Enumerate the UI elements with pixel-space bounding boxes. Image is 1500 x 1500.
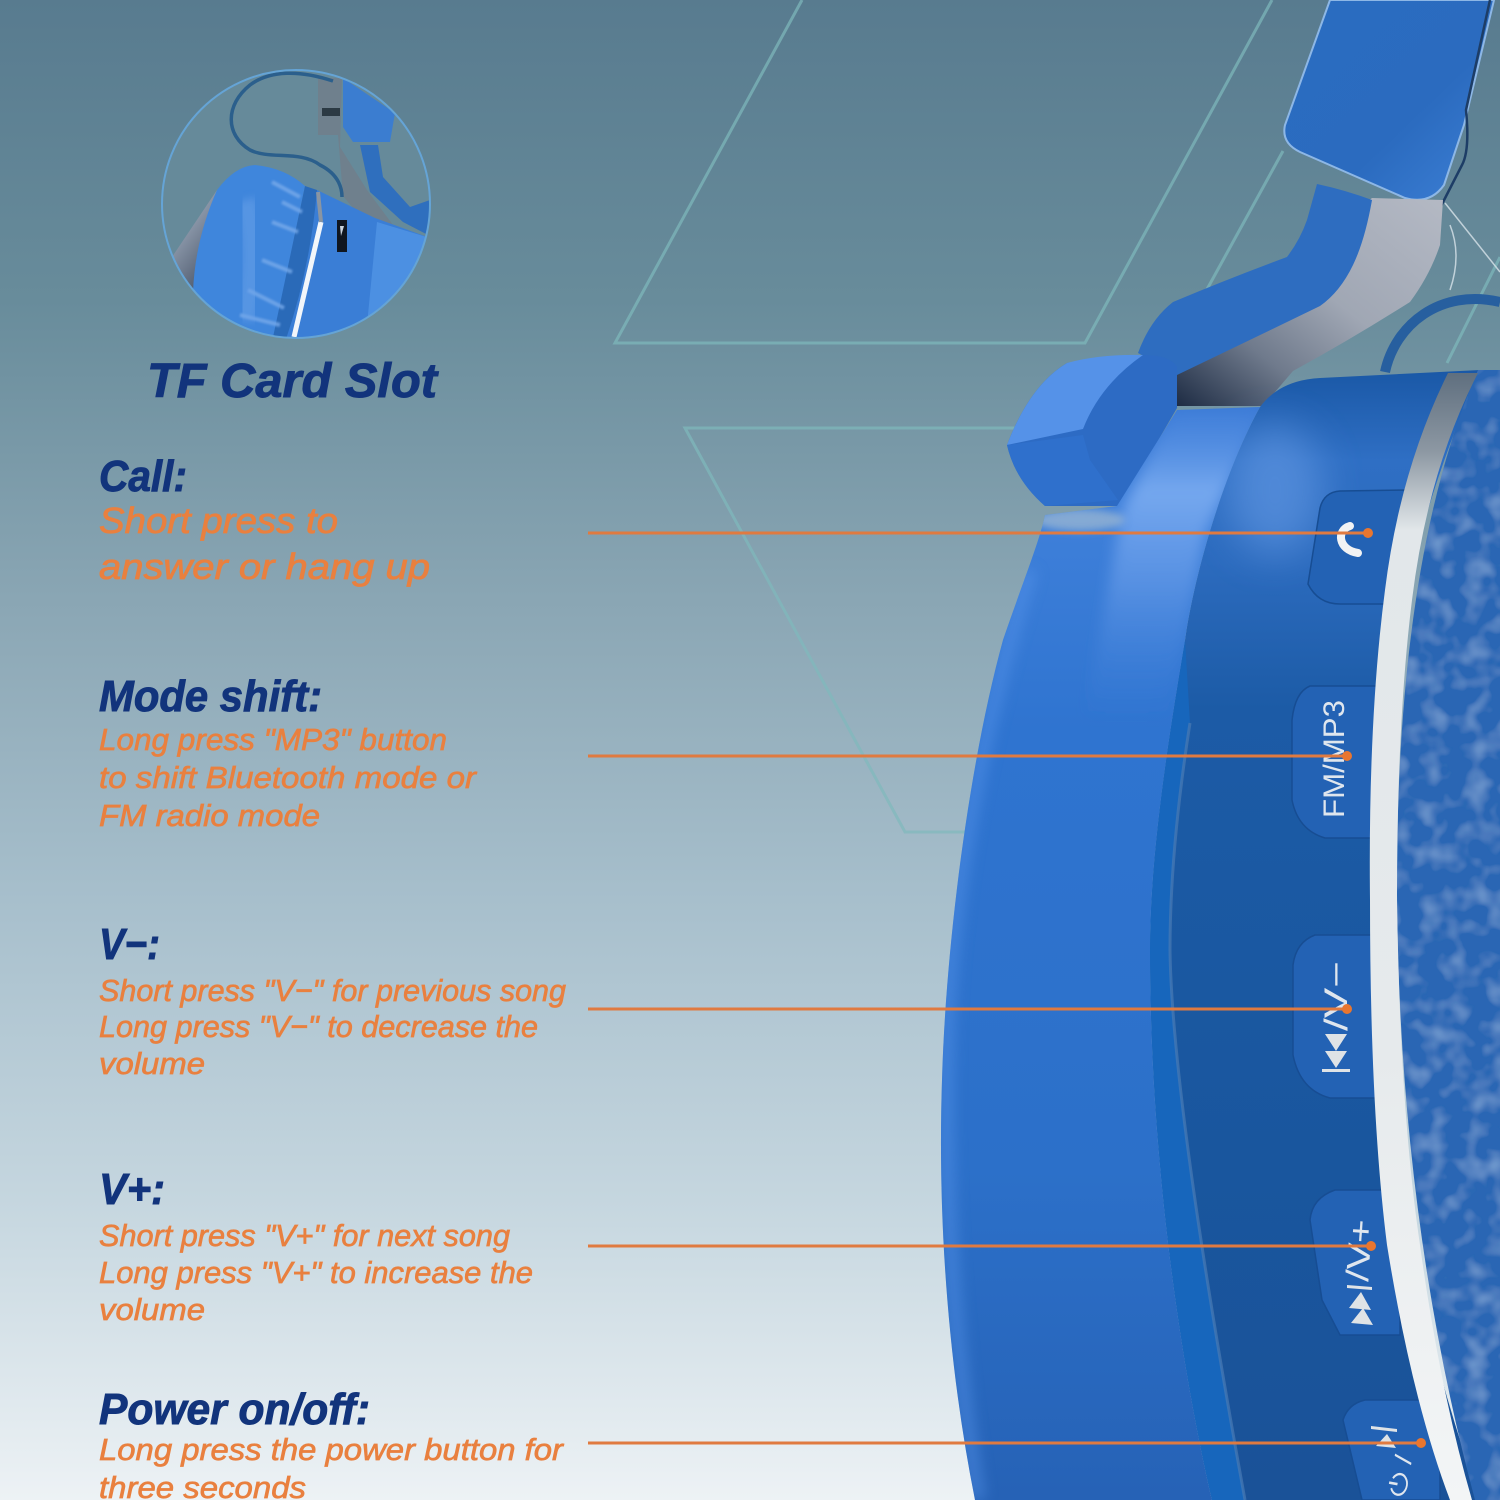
inner highlight [1227,425,1323,555]
callout: V+ [588,1241,1376,1251]
button: V+ [1310,1190,1400,1335]
cable loop [1385,299,1500,372]
earpad rim [272,186,317,342]
blue yoke arm [1138,184,1372,375]
icon: next track [1347,1285,1373,1325]
earpad gray side [174,191,216,288]
cable [231,73,342,197]
button: V+: /V+ [1339,1218,1379,1282]
text block: V-: volume [99,1046,205,1081]
callout: power [588,1438,1426,1448]
title: TF Card Slot: TF Card Slot [147,355,439,408]
metal yoke arm [1177,198,1443,406]
text block: call: answer or hang up [99,546,430,587]
earpad [193,165,305,345]
text block: V+ [99,1165,533,1327]
text block: V+: Long press "V+" to increase the [99,1255,533,1290]
text block: V-: Short press "V−" for previous song [99,973,566,1008]
text block: V+: V+: [99,1165,165,1214]
text block: call: Short press to [99,500,338,541]
callout lines [588,528,1426,1448]
text block: mode shift: FM radio mode [99,798,320,833]
callout: V- [588,1004,1352,1014]
fabric ear cover [1397,370,1500,1500]
text block: V+: Short press "V+" for next song [99,1218,510,1253]
callout: mode shift [588,751,1352,761]
icon: play pause [1371,1426,1397,1448]
text block: V-: Long press "V−" to decrease the [99,1009,538,1044]
pad [343,78,395,142]
illustration: headphone [930,0,1500,1500]
white ring [294,222,321,337]
yoke stub [1007,355,1177,506]
icon: previous track [1322,1034,1350,1072]
decorative parallelogram outlines [615,0,1500,832]
medium strip on inner band [1150,640,1245,1500]
text block: mode shift: Mode shift: [99,672,322,721]
headband seam wire [1440,0,1490,208]
groove line [1170,723,1245,1500]
text block: mode shift: Long press "MP3" button [99,722,447,757]
text block: power: Power on/off: [99,1385,370,1434]
button: call [1308,490,1410,604]
icon: phone [1341,526,1358,553]
earpad folds [240,182,302,325]
left outer band of earcup [930,400,1270,1500]
thin white wires [1445,203,1500,290]
inset circle outline [162,70,430,338]
button: power [1343,1400,1440,1500]
slot [337,220,347,252]
button: FM/MP3 [1292,686,1385,838]
text block: mode shift: to shift Bluetooth mode or [99,760,478,795]
button: V- [1293,935,1385,1098]
button: FM/MP3: FM/MP3 [1318,700,1351,818]
earcup [286,190,425,337]
text block: call: Call: [99,452,187,501]
metal arm [318,78,393,228]
text block: power: Long press the power button for [99,1432,565,1467]
silver ring [1370,373,1478,1500]
text block: mode shift [99,672,478,833]
text block: V- [99,920,566,1081]
button: V-: /V− [1318,961,1354,1031]
text block: V+: volume [99,1292,205,1327]
button: power: ⏻ / [1384,1453,1418,1499]
text block: power [99,1385,565,1500]
text block: call [99,452,430,587]
headband pad [1284,0,1494,200]
text block: V-: V−: [99,920,160,969]
inset: TF card slot circle [162,70,430,345]
callout: call [588,528,1373,538]
blue arm [360,145,430,235]
right inner band of earcup [1150,370,1480,1500]
